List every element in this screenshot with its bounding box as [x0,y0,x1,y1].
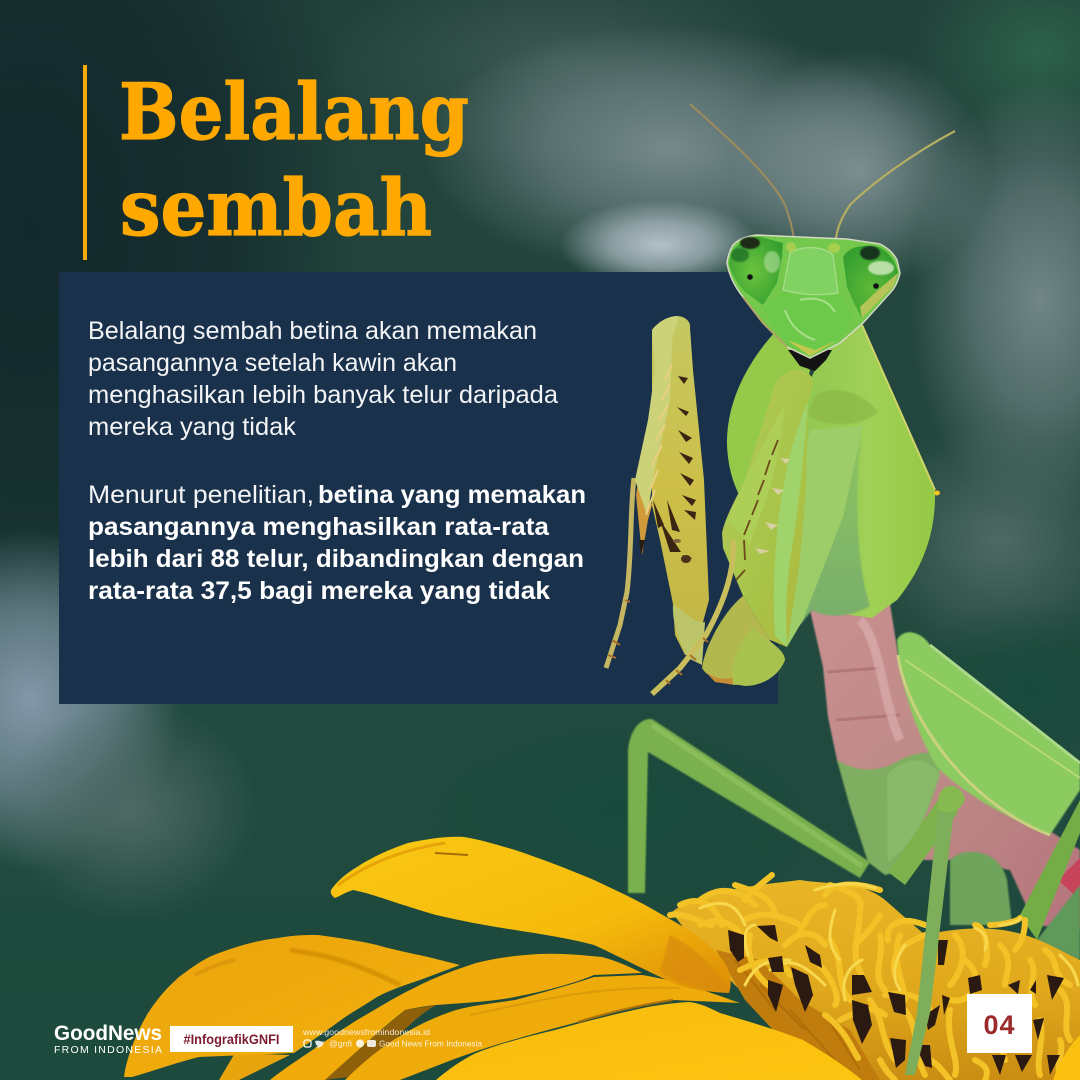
coxa right bulb [732,628,785,686]
femur [652,316,709,655]
abdomen wing [897,632,1080,835]
spines [755,458,790,554]
pink thorax [810,604,1080,930]
text block: intro paragraph: Belalang sembah betina akan memakan [88,317,537,345]
social links and website [302,1027,482,1048]
social links and website: @gnfi [329,1038,352,1048]
illustration: mantis rear body and legs [628,604,1080,960]
top curled petal [331,837,731,993]
icon: twitter [315,1040,324,1048]
hind leg left [628,719,870,893]
icon: youtube [367,1040,376,1047]
dark gap [325,1005,436,1080]
text block: intro paragraph: menghasilkan lebih banyak telur daripada [88,381,558,409]
knee [938,786,965,812]
text block: research paragraph: pasangannya menghasilkan rata-rata [88,513,550,541]
text block: research paragraph: Menurut penelitian, [88,481,314,509]
right corner petal [1053,1035,1080,1080]
body column [800,428,870,625]
wide petal [345,975,740,1080]
antennae [690,104,794,238]
logo: GoodNews From Indonesia [54,1022,162,1056]
head outline [727,235,900,358]
panel: text background [59,272,778,704]
illustration: mantis right raptorial arm [652,370,813,694]
logo: GoodNews From Indonesia: GoodNews [54,1022,162,1045]
spines [653,376,696,563]
femur [888,790,958,885]
illustration: sunflower disc [670,875,1080,1080]
front petal [436,1002,862,1080]
seeds [728,925,1064,1075]
face shield plate [783,248,838,295]
left wing [727,332,810,505]
illustration: mantis left raptorial arm [606,316,709,668]
page number: 04 [983,1010,1016,1040]
text block: intro paragraph: mereka yang tidak [88,413,297,441]
icon: facebook [356,1040,364,1048]
brown florets [716,950,880,1080]
illustration: mantis head and antennae [690,104,955,371]
coxa lower [673,605,705,665]
lower thorax green [837,753,943,875]
text block: research paragraph: lebih dari 88 telur, dibandingkan dengan [88,545,584,573]
title: sembah [120,163,432,254]
logo: GoodNews From Indonesia: FROM INDONESIA [54,1044,162,1056]
title accent bar [83,65,87,260]
small back petal [219,1053,290,1080]
coxa left bulge [702,596,770,685]
lower-left petal [124,935,460,1077]
illustration: mantis leaf wings and body [727,325,940,647]
leg segment behind [950,852,1012,925]
text block: research paragraph: betina yang memakan [318,481,586,509]
far right leg [1020,800,1080,940]
text block: intro paragraph: pasangannya setelah kawin akan [88,349,457,377]
right wing [790,325,935,618]
hashtag label [170,1026,293,1052]
femur [722,370,813,647]
stamens [670,875,1070,1080]
illustration: mantis leg on flower [888,786,965,1075]
tibia [905,810,954,1075]
chin mouth [788,350,832,371]
tibia tip and claw [636,470,652,555]
icon: instagram [304,1040,311,1047]
hashtag label: #InfografikGNFI [184,1032,280,1047]
tarsus [652,540,733,694]
social links and website: www.goodnewsfromindonesia.id [302,1027,430,1037]
tarsus [606,478,634,668]
lime strip [774,402,808,647]
text block: research paragraph: rata-rata 37,5 bagi mereka yang tidak [88,577,550,605]
social links and website: Good News From Indonesia [379,1038,482,1048]
text block: intro paragraph [88,317,558,441]
lower face [763,290,853,356]
title [119,67,469,254]
inner blade [635,316,678,515]
page number [967,994,1032,1053]
title: Belalang [119,67,469,158]
mid wing panel [775,426,863,647]
illustration: sunflower petals [124,837,862,1080]
text block: research paragraph [88,481,586,605]
eyes [729,237,783,305]
middle petal [270,954,642,1080]
